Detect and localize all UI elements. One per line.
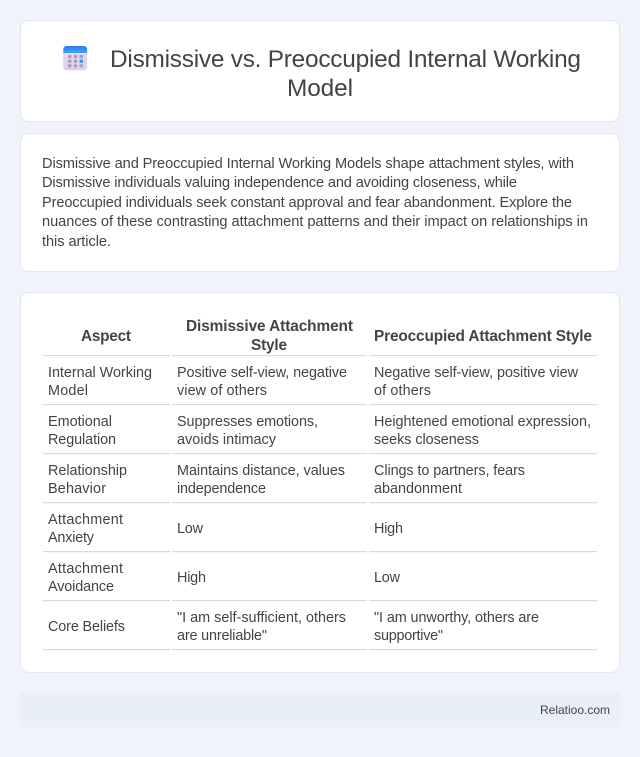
intro text: Dismissive individuals valuing independence and avoiding closeness, while: [42, 175, 517, 191]
row: relationship behavior: Maintains distance, values: [177, 463, 345, 479]
table header: Aspect: [81, 328, 131, 345]
table header: [81, 318, 592, 354]
panel: comparison table: [20, 292, 620, 672]
icon: calendar: [63, 46, 87, 70]
row: relationship behavior: Clings to partners, fears: [374, 463, 525, 479]
table row lines: [43, 355, 597, 650]
row: core beliefs: supportive": [374, 628, 443, 644]
title: Dismissive vs. Preoccupied Internal Working: [110, 46, 581, 73]
row: relationship behavior: independence: [177, 481, 266, 497]
panel: introduction: [20, 134, 620, 272]
row: emotional regulation: seeks closeness: [374, 432, 479, 448]
row: emotional regulation: Heightened emotional expression,: [374, 414, 591, 430]
row: internal working model: of others: [374, 383, 431, 399]
row: attachment anxiety: [48, 512, 403, 546]
row: attachment avoidance: Attachment: [48, 561, 123, 577]
intro text: this article.: [42, 234, 111, 250]
row: attachment anxiety: Attachment: [48, 512, 123, 528]
intro text: Dismissive and Preoccupied Internal Working Models shape attachment styles, with: [42, 156, 574, 172]
title: Model: [287, 75, 353, 102]
row: attachment avoidance: [48, 561, 401, 595]
row: core beliefs: are unreliable": [177, 628, 267, 644]
row: relationship behavior: abandonment: [374, 481, 462, 497]
panel: title card: [20, 20, 620, 122]
row: internal working model: view of others: [177, 383, 267, 399]
row: attachment anxiety: High: [374, 521, 403, 537]
table header: Style: [251, 337, 287, 354]
footer bar: [20, 693, 620, 727]
intro text: Preoccupied individuals seek constant approval and fear abandonment. Explore the: [42, 195, 572, 211]
row: attachment avoidance: High: [177, 570, 206, 586]
row: internal working model: Internal Working: [48, 365, 152, 381]
row: internal working model: [48, 365, 579, 399]
row: attachment anxiety: Anxiety: [48, 530, 95, 546]
row: attachment avoidance: Avoidance: [48, 579, 114, 595]
row: core beliefs: "I am self-sufficient, others: [177, 610, 346, 626]
row: internal working model: Positive self-view, negative: [177, 365, 347, 381]
row: attachment anxiety: Low: [177, 521, 204, 537]
row: internal working model: Model: [48, 383, 88, 399]
footer bar: Relatioo.com: [540, 703, 610, 717]
row: relationship behavior: Behavior: [48, 481, 106, 497]
title: [110, 46, 581, 102]
row: emotional regulation: [48, 414, 591, 448]
row: emotional regulation: avoids intimacy: [177, 432, 277, 448]
row: emotional regulation: Suppresses emotions,: [177, 414, 318, 430]
row: emotional regulation: Emotional: [48, 414, 112, 430]
row: attachment avoidance: Low: [374, 570, 401, 586]
row: internal working model: Negative self-view, positive view: [374, 365, 579, 381]
row: emotional regulation: Regulation: [48, 432, 116, 448]
row: core beliefs: [48, 610, 539, 644]
row: relationship behavior: [48, 463, 525, 497]
intro text: nuances of these contrasting attachment patterns and their impact on relationships in: [42, 214, 588, 230]
row: core beliefs: Core Beliefs: [48, 619, 125, 635]
intro text: [42, 156, 588, 250]
row: core beliefs: "I am unworthy, others are: [374, 610, 539, 626]
table header: Dismissive Attachment: [186, 318, 353, 335]
row: relationship behavior: Relationship: [48, 463, 127, 479]
table header: Preoccupied Attachment Style: [374, 328, 592, 345]
